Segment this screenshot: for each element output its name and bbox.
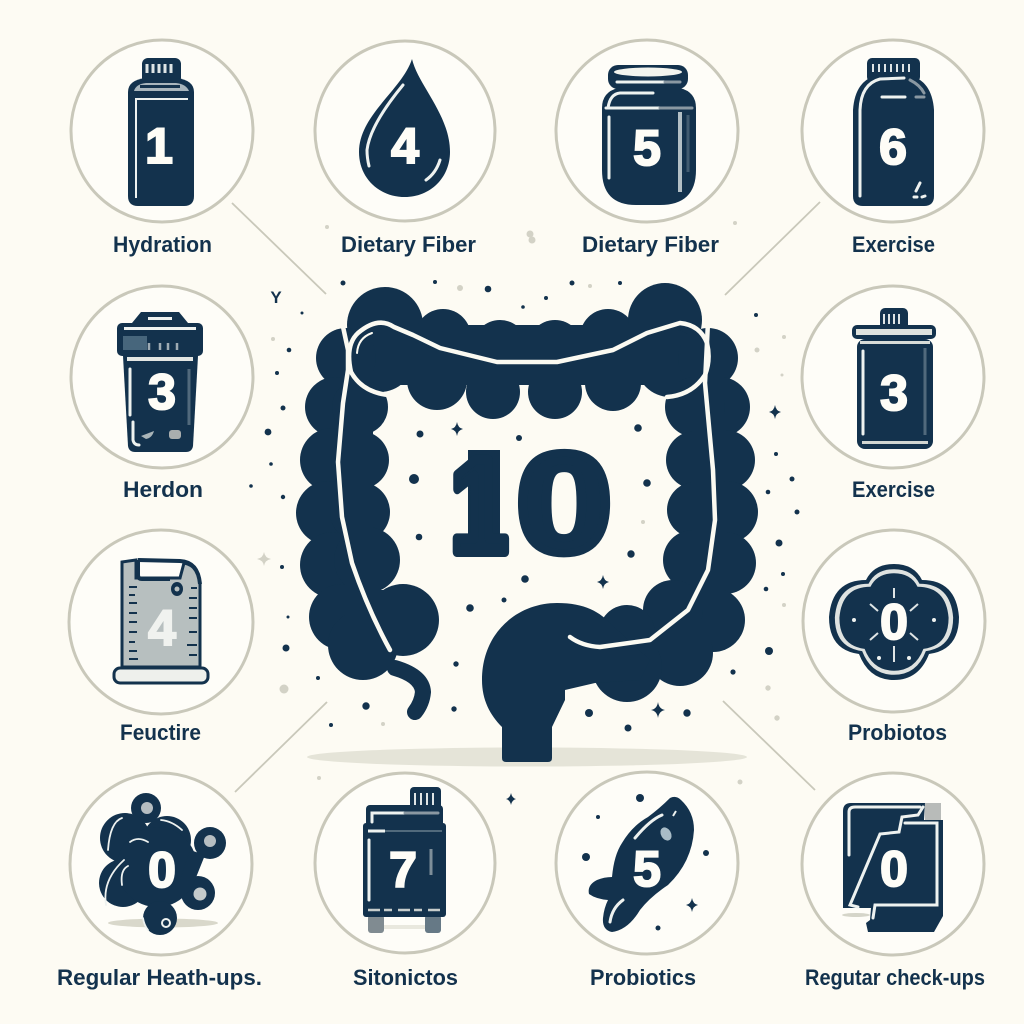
big number 10 [450,424,612,582]
number 4: 4 [148,600,176,656]
big number 10: 0 [516,424,612,582]
ground shadow [307,748,747,766]
icon: blob microbe [99,793,226,935]
number 0: 0 [880,594,908,650]
panel: Dietary Fiber jar [556,40,738,257]
icon: cup [117,312,203,452]
panel: Regular Heath-ups blob [57,773,262,990]
label: Herdon [123,477,203,502]
label: Regutar check-ups [805,965,985,990]
central colon illustration [296,283,758,762]
colon body silhouette [296,283,758,762]
label: Probiotics [590,965,696,990]
label: Exercise [852,232,935,257]
colon white outline [338,322,715,650]
number 7: 7 [389,842,417,898]
panel: Probiotos flower [803,530,985,745]
icon: canister [852,308,936,449]
icon: device on wheels [363,787,446,933]
panel: Herdon cup [71,286,253,502]
label: Probiotos [848,720,947,745]
number 4: 4 [391,118,419,174]
stray letter Y: Y [270,288,282,307]
label: Sitonictos [353,965,458,990]
icon: folder document [842,803,943,932]
icon: beaker [114,560,208,683]
number 3: 3 [148,364,176,420]
icon: leaf probiotic [589,797,694,932]
label: Dietary Fiber [341,232,476,257]
number 0: 0 [880,841,908,897]
panel: Exercise canister [802,286,984,502]
number 6: 6 [879,119,907,175]
connector lines [232,202,820,792]
number 5: 5 [633,841,661,897]
panel: Sitonictos device [315,773,495,990]
background particles [249,280,799,805]
surrounding particles [582,794,709,930]
label: Hydration [113,232,212,257]
panel: Regutar check-ups folder [802,773,985,990]
panel: Dietary Fiber drop [315,41,495,257]
panel: Exercise bottle [802,40,984,257]
panel: Feuctire beaker [69,530,253,745]
panel: Hydration bottle [71,40,253,257]
number 3: 3 [880,365,908,421]
icon: tall bottle [853,58,934,206]
faint grey specks [257,221,786,784]
icon: jar [602,65,696,205]
big number 10: 1 [450,432,508,581]
number 0: 0 [148,842,176,898]
label: Regular Heath-ups. [57,965,262,990]
panel: Probiotics leaf [556,772,738,990]
icon: water drop [359,59,450,197]
number 1: 1 [145,118,173,174]
label: Dietary Fiber [582,232,719,257]
icon: bottle [128,58,194,206]
label: Feuctire [120,720,201,745]
icon: probiotic flower [829,564,959,680]
number 5: 5 [633,120,661,176]
label: Exercise [852,477,935,502]
